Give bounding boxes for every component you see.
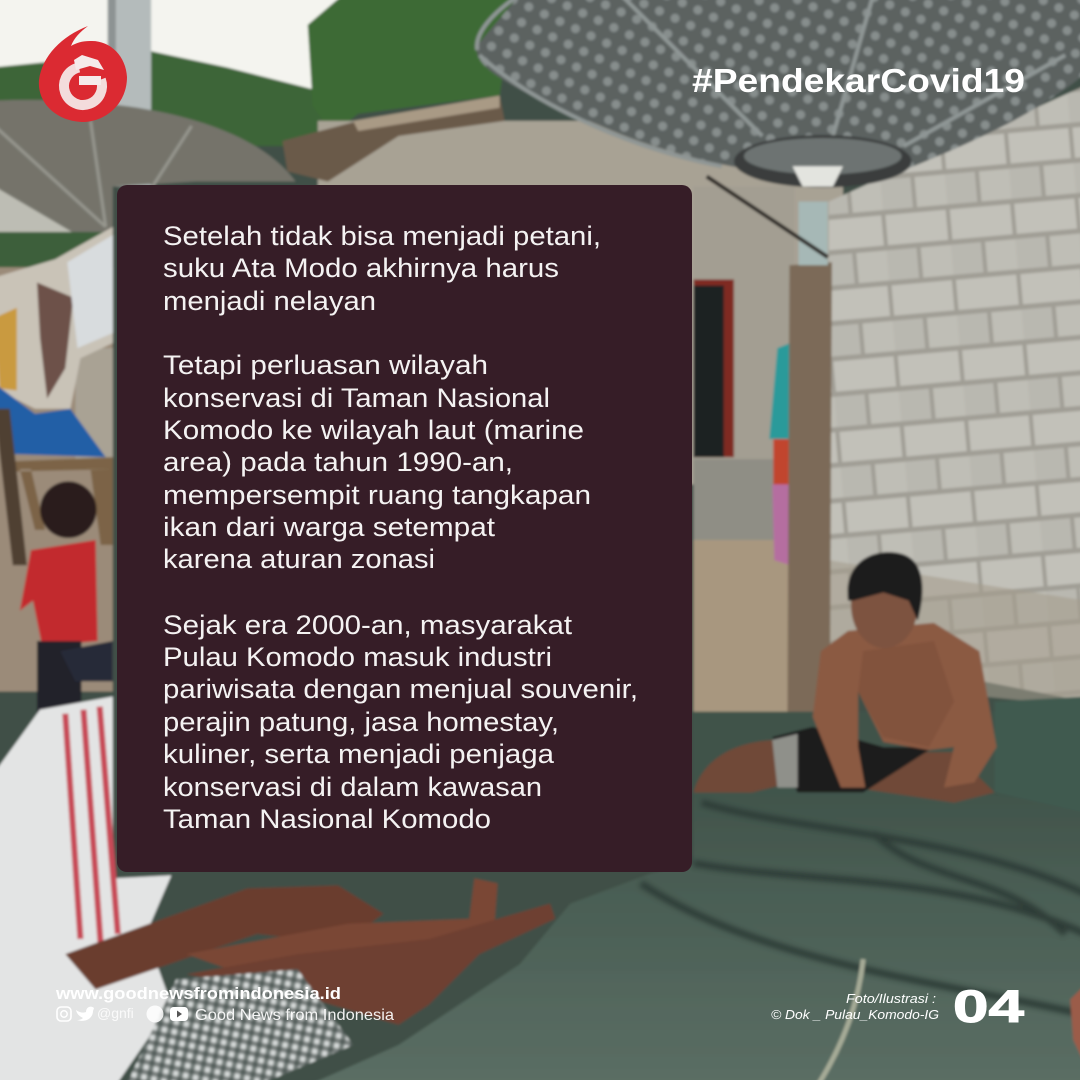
hanging cloth (769, 343, 790, 439)
paragraph 1 (163, 221, 601, 316)
paragraph 3 (163, 610, 638, 834)
icon: youtube (170, 1007, 188, 1021)
paragraph 2: ikan dari warga setempat (163, 512, 496, 542)
paragraph 2: Tetapi perluasan wilayah (163, 350, 488, 380)
paragraph 1: suku Ata Modo akhirnya harus (163, 253, 559, 283)
girl in red (20, 481, 98, 717)
ground and net shadow band right (694, 712, 1080, 833)
paragraph 1: Setelah tidak bisa menjadi petani, (163, 221, 601, 251)
left hillside band (0, 232, 113, 272)
page number: 04 (953, 981, 1024, 1032)
paragraph 3: perajin patung, jasa homestay, (163, 707, 559, 737)
facebook and youtube name: Good News from Indonesia (195, 1007, 394, 1024)
nets (308, 777, 1080, 1080)
icon: instagram (57, 1007, 71, 1021)
paragraph 2 (163, 350, 591, 574)
door (694, 279, 734, 457)
blue object (0, 383, 106, 457)
house roof (282, 96, 505, 181)
wooden table (15, 457, 113, 545)
photo credit (771, 991, 939, 1022)
paragraph 3: konservasi di dalam kawasan (163, 772, 542, 802)
paragraph 2: area) pada tahun 1990-an, (163, 447, 513, 477)
website url: www.goodnewsfromindonesia.id (55, 984, 341, 1003)
wooden post (787, 262, 832, 714)
paragraph 3: kuliner, serta menjadi penjaga (163, 739, 554, 769)
laundry (0, 227, 113, 409)
footer: website and social handles (55, 984, 394, 1024)
brick wall (829, 85, 1080, 702)
icon: facebook (146, 1006, 164, 1022)
top right satellite dish (477, 0, 1080, 257)
pole (108, 0, 151, 186)
paragraph 3: Pulau Komodo masuk industri (163, 642, 552, 672)
paragraph 2: konservasi di Taman Nasional (163, 383, 550, 413)
tree (308, 0, 515, 134)
paragraph 3: Taman Nasional Komodo (163, 804, 491, 834)
hashtag heading: #PendekarCovid19 (692, 62, 1025, 99)
seated man (694, 552, 997, 803)
paragraph 2: mempersempit ruang tangkapan (163, 480, 591, 510)
paragraph 1: menjadi nelayan (163, 286, 376, 316)
twitter handle: @gnfi (97, 1005, 134, 1021)
logo: GNFI red drop (39, 26, 127, 122)
hills (0, 50, 338, 146)
seated person arm and legs (65, 878, 555, 1080)
icon: twitter (76, 1007, 94, 1021)
photo credit: © Dok _ Pulau_Komodo-IG (771, 1007, 939, 1022)
left dish (0, 100, 296, 242)
paragraph 3: Sejak era 2000-an, masyarakat (163, 610, 573, 640)
left ground (0, 267, 113, 691)
sky (0, 0, 439, 96)
right inner wall (694, 186, 795, 464)
paragraph 2: karena aturan zonasi (163, 544, 435, 574)
ground right (694, 540, 835, 732)
house wall behind (318, 121, 843, 484)
photo credit: Foto/Ilustrasi : (846, 991, 936, 1006)
paragraph 2: Komodo ke wilayah laut (marine (163, 415, 584, 445)
paragraph 3: pariwisata dengan menjual souvenir, (163, 674, 638, 704)
text panel (117, 185, 692, 872)
low wall (694, 459, 784, 545)
rear left person: cap and shirt (0, 641, 171, 1080)
